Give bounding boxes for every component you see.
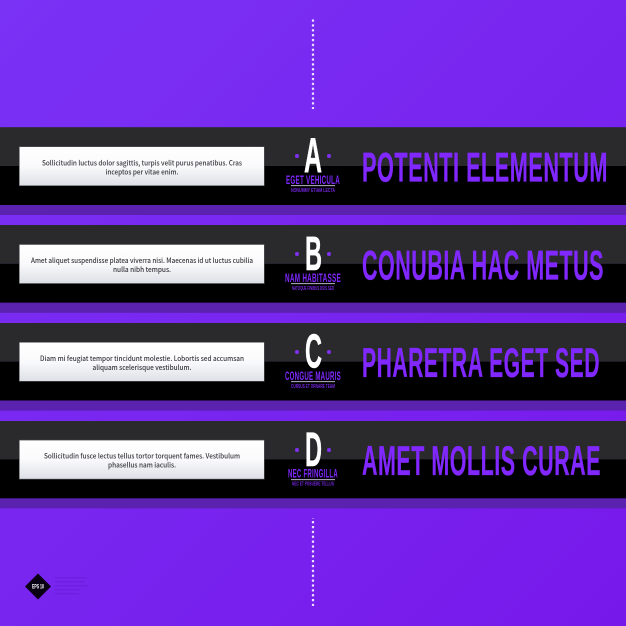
letter A: A xyxy=(304,129,322,183)
panel: C xyxy=(0,323,626,411)
text box C: Diam mi feugiat tempor tincidunt molestie. Lobortis sed accumsan xyxy=(40,354,244,364)
top dotted line xyxy=(312,19,314,109)
letter dots C xyxy=(295,350,331,354)
text box A xyxy=(19,147,264,186)
text box A: Sollicitudin luctus dolor sagittis, turpis velit purus penatibus. Cras xyxy=(42,158,243,168)
caption B: NATOQUE FINIBUS DUIS SED xyxy=(292,286,334,292)
panel: B: B xyxy=(305,228,322,281)
caption A: NONUMMY ETIAM LECTA xyxy=(291,188,335,194)
panel: C: C xyxy=(305,326,322,378)
caption D: NEC ET POSUERE TELLUS xyxy=(292,482,334,488)
text box B: Amet aliquet suspendisse platea viverra nisi. Maecenas id ut luctus cubilia xyxy=(31,256,253,266)
text box A: inceptos per vitae enim. xyxy=(106,167,178,177)
panel: B xyxy=(0,225,626,313)
subtitle C: CONGUE MAURIS xyxy=(285,369,341,383)
fine print xyxy=(55,577,88,594)
text box B xyxy=(19,244,264,284)
subtitle A: EGET VEHICULA xyxy=(286,173,340,187)
text box D: phasellus nam iaculis. xyxy=(108,461,176,471)
text box C xyxy=(19,342,264,381)
subtitle B: NAM HABITASSE xyxy=(285,271,341,285)
text box C: aliquam scelerisque vestibulum. xyxy=(92,363,192,373)
text box D xyxy=(19,440,264,479)
panel: D xyxy=(0,421,626,508)
text box B: nulla nibh tempus. xyxy=(113,265,171,275)
letter dots A xyxy=(295,154,331,158)
badge: EPS 10 xyxy=(25,574,51,600)
text box D: Sollicitudin fusce lectus tellus tortor torquent fames. Vestibulum xyxy=(44,452,240,462)
badge: EPS 10: EPS 10 xyxy=(32,584,44,590)
panel: A xyxy=(0,127,626,215)
panel: D: D xyxy=(305,424,322,477)
bottom dotted line xyxy=(312,518,314,606)
subtitle D: NEC FRINGILLA xyxy=(288,466,338,480)
letter dots D xyxy=(295,448,331,452)
letter dots B xyxy=(295,252,331,256)
caption C: CURSUS ET ORNARE TEAM xyxy=(291,384,335,390)
